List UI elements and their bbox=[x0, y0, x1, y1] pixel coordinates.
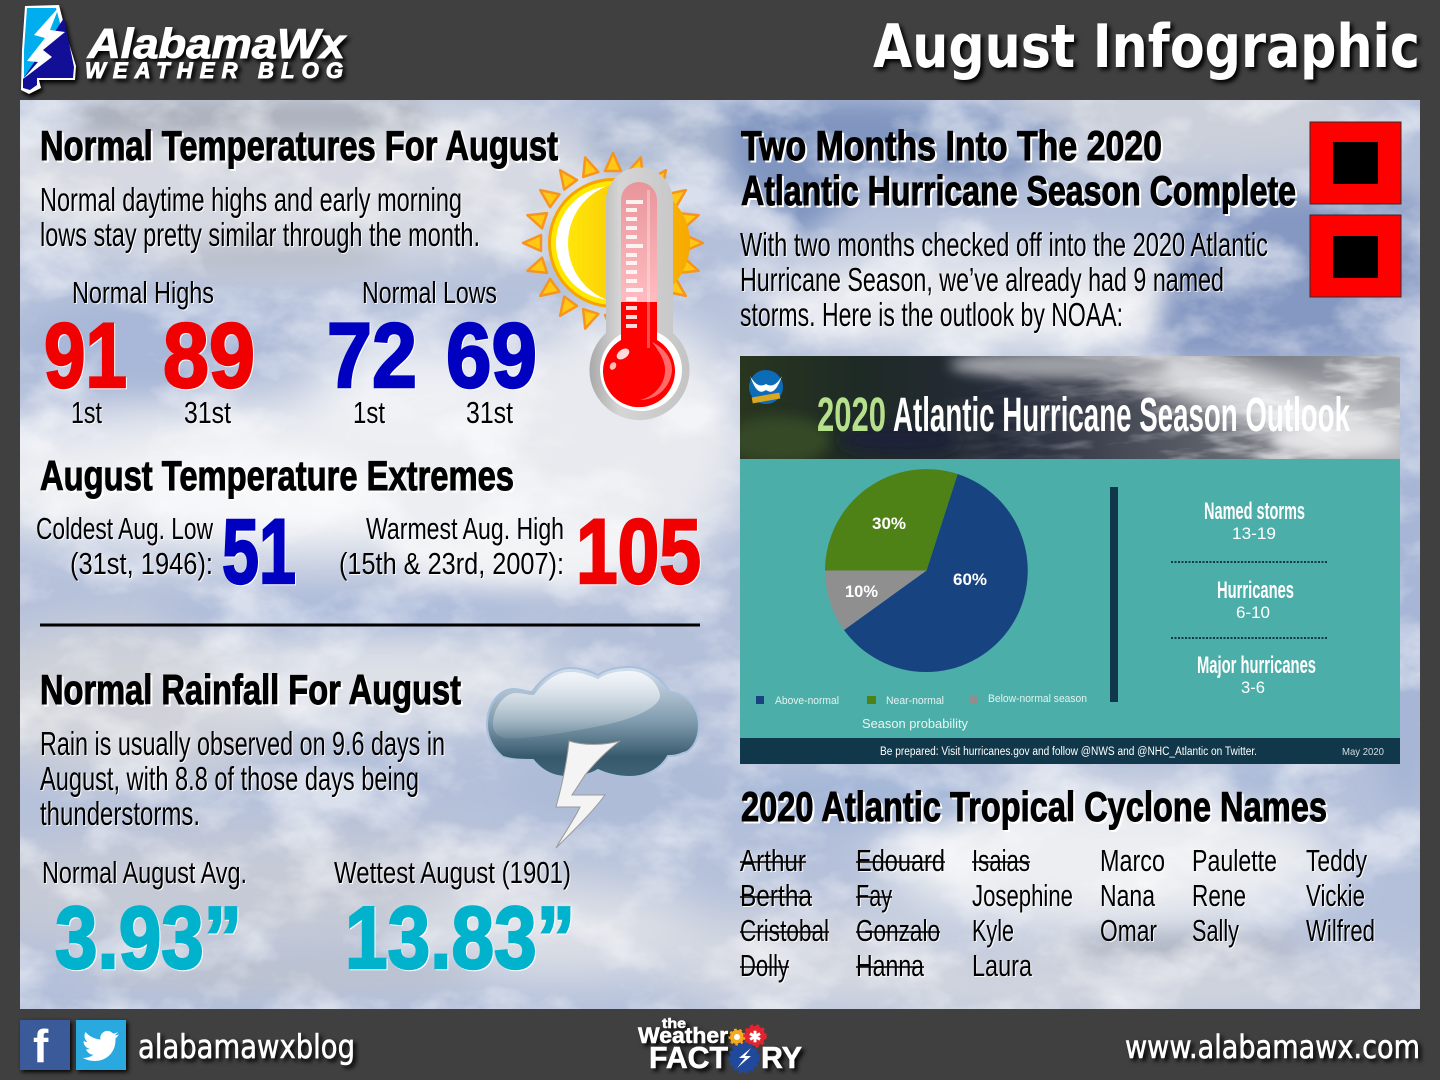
names column 4: Omar bbox=[1100, 913, 1157, 948]
text block: coldest low bbox=[36, 511, 213, 581]
stat: normal August rainfall bbox=[42, 855, 247, 987]
outlook footer bar: May 2020 bbox=[1342, 746, 1384, 758]
icon: Facebook: f bbox=[33, 1020, 49, 1072]
pie legend bbox=[756, 693, 1087, 707]
text block: warmest high: Warmest Aug. High bbox=[366, 511, 564, 546]
names column 6 bbox=[1306, 843, 1375, 948]
names column 2 (used names struck through): Fay bbox=[856, 878, 892, 913]
stat: low on the 1st: 1st bbox=[353, 395, 385, 430]
pie legend: Near-normal bbox=[886, 695, 944, 707]
heading: hurricane season bbox=[741, 122, 1296, 214]
text block: coldest low: Coldest Aug. Low bbox=[36, 511, 213, 546]
heading: hurricane season: Two Months Into The 2020 bbox=[741, 122, 1162, 169]
pie chart: season probability: 30% bbox=[872, 514, 906, 533]
stat: normal August rainfall: Normal August Avg. bbox=[42, 855, 247, 890]
icon: NOAA logo bbox=[749, 370, 783, 404]
hurricanes range: 6-10 bbox=[1236, 603, 1270, 622]
names column 2 (used names struck through): Edouard bbox=[856, 843, 945, 878]
text block: rainfall description: Rain is usually observed on 9.6 days in bbox=[40, 725, 445, 762]
panel: normal temperatures bbox=[40, 122, 558, 430]
names column 3 bbox=[972, 843, 1073, 983]
outlook body background bbox=[740, 459, 1400, 738]
stat: low on the 31st: 69 bbox=[446, 305, 537, 407]
icon: hurricane warning flag bottom bbox=[1310, 215, 1401, 297]
names column 5: Sally bbox=[1192, 913, 1239, 948]
logo tagline: WEATHER BLOG bbox=[85, 58, 343, 83]
names column 5 bbox=[1192, 843, 1277, 948]
names column 1 (used names struck through) bbox=[740, 843, 829, 983]
logo: the Weather Factory: the bbox=[662, 1015, 686, 1031]
social handle: alabamawxblog bbox=[138, 1027, 355, 1066]
names column 3: Isaias bbox=[972, 843, 1030, 878]
panel: tropical cyclone names bbox=[740, 783, 1375, 983]
names column 1 (used names struck through): Bertha bbox=[740, 878, 813, 913]
hurricanes range: Hurricanes bbox=[1217, 577, 1294, 604]
stat: warmest high value: 105 bbox=[576, 501, 701, 603]
names column 4 bbox=[1100, 843, 1165, 948]
label: normal highs: Normal Highs bbox=[72, 275, 214, 310]
names column 2 (used names struck through): Hanna bbox=[856, 948, 925, 983]
stat: low on the 31st: 31st bbox=[466, 395, 513, 430]
stat: low on the 1st: 72 bbox=[327, 305, 417, 407]
logo wordmark: AlabamaWx bbox=[87, 20, 347, 67]
icon: Alabama state lightning logo bbox=[21, 5, 76, 94]
text block: season description bbox=[740, 226, 1268, 333]
icon: Facebook bbox=[20, 1020, 70, 1072]
names column 4: Nana bbox=[1100, 878, 1156, 913]
outlook footer bar: Be prepared: Visit hurricanes.gov and follow @NWS and @NHC_Atlantic on Twitter. bbox=[880, 746, 1257, 758]
names column 1 (used names struck through): Cristobal bbox=[740, 913, 829, 948]
names column 1 (used names struck through): Dolly bbox=[740, 948, 789, 983]
text block: rainfall description: thunderstorms. bbox=[40, 795, 200, 832]
names column 6: Wilfred bbox=[1306, 913, 1375, 948]
major hurricanes range bbox=[1197, 652, 1316, 697]
pie legend: Above-normal bbox=[775, 695, 839, 707]
logo: the Weather Factory: Weather bbox=[638, 1023, 728, 1048]
icon: sun behind thermometer bbox=[523, 153, 703, 333]
text block: season description: storms. Here is the outlook by NOAA: bbox=[740, 296, 1123, 333]
icon: orange gear bbox=[730, 1030, 744, 1044]
names column 5: Paulette bbox=[1192, 843, 1277, 878]
panel: header logo bbox=[21, 5, 347, 94]
pie chart: season probability: 60% bbox=[953, 570, 987, 589]
named storms range bbox=[1204, 498, 1305, 543]
names column 3: Josephine bbox=[972, 878, 1073, 913]
named storms range: 13-19 bbox=[1232, 524, 1276, 543]
stat: high on the 1st: 91 bbox=[44, 305, 127, 407]
major hurricanes range: Major hurricanes bbox=[1197, 652, 1316, 679]
stat: high on the 31st: 31st bbox=[184, 395, 231, 430]
pie chart: season probability bbox=[825, 469, 1028, 672]
stat: high on the 31st: 89 bbox=[163, 305, 255, 407]
stat: high on the 1st bbox=[44, 305, 127, 430]
names column 1 (used names struck through): Arthur bbox=[740, 843, 806, 878]
text block: coldest low: (31st, 1946): bbox=[70, 546, 213, 581]
text block: rainfall description bbox=[40, 725, 445, 832]
text block: warmest high bbox=[339, 511, 564, 581]
outlook title: 2020 bbox=[817, 389, 886, 442]
outlook header: satellite image and title bbox=[740, 356, 1400, 459]
text block: rainfall description: August, with 8.8 of those days being bbox=[40, 760, 419, 797]
names column 6: Vickie bbox=[1306, 878, 1365, 913]
panel: temperature extremes bbox=[36, 452, 701, 603]
names column 4: Marco bbox=[1100, 843, 1165, 878]
icon: storm cloud with lightning bbox=[487, 667, 699, 848]
forecast ranges bbox=[1171, 498, 1328, 697]
panel: NOAA 2020 outlook graphic bbox=[740, 356, 1400, 764]
panel: normal rainfall bbox=[40, 666, 575, 987]
icon: hurricane warning flag top bbox=[1310, 122, 1401, 204]
heading: temperature extremes: August Temperature Extremes bbox=[40, 452, 514, 499]
panel: hurricane season text bbox=[740, 122, 1296, 333]
icon: red gear: ✱ bbox=[749, 1029, 762, 1046]
major hurricanes range: 3-6 bbox=[1241, 678, 1265, 697]
text block: temperature description: Normal daytime highs and early morning bbox=[40, 181, 462, 218]
text block: temperature description: lows stay pretty similar through the month. bbox=[40, 216, 480, 253]
names column 3: Laura bbox=[972, 948, 1033, 983]
pie chart: season probability: 10% bbox=[845, 582, 878, 601]
stat: coldest low value: 51 bbox=[222, 501, 296, 603]
stat: wettest August rainfall: 13.83” bbox=[345, 888, 575, 987]
logo: the Weather Factory: FACT bbox=[649, 1040, 728, 1075]
text block: warmest high: (15th & 23rd, 2007): bbox=[339, 546, 564, 581]
icon: Twitter bbox=[76, 1020, 126, 1070]
text block: temperature description bbox=[40, 181, 480, 253]
hurricanes range bbox=[1217, 577, 1294, 622]
names column 6: Teddy bbox=[1306, 843, 1367, 878]
text block: season description: Hurricane Season, we’ve already had 9 named bbox=[740, 261, 1224, 298]
names column 2 (used names struck through) bbox=[856, 843, 945, 983]
icon: blue gear bbox=[730, 1044, 758, 1072]
logo: the Weather Factory bbox=[638, 1015, 802, 1075]
named storms range: Named storms bbox=[1204, 498, 1305, 525]
pie caption: Season probability bbox=[862, 716, 968, 731]
names column 5: Rene bbox=[1192, 878, 1246, 913]
icon: thermometer bbox=[590, 168, 690, 420]
outlook footer bar bbox=[740, 738, 1400, 764]
stat: high on the 1st: 1st bbox=[71, 395, 102, 430]
panel: footer bbox=[20, 1015, 1420, 1075]
names column 2 (used names struck through): Gonzalo bbox=[856, 913, 940, 948]
stat: wettest August rainfall: Wettest August (1901) bbox=[334, 855, 571, 890]
stat: wettest August rainfall bbox=[334, 855, 575, 987]
stat: normal August rainfall: 3.93” bbox=[55, 888, 242, 987]
heading: normal temperatures: Normal Temperatures For August bbox=[40, 122, 558, 169]
label: normal lows: Normal Lows bbox=[362, 275, 497, 310]
vertical divider bar bbox=[1110, 487, 1118, 702]
names column 3: Kyle bbox=[972, 913, 1014, 948]
pie legend: Below-normal season bbox=[988, 693, 1087, 705]
heading: normal rainfall: Normal Rainfall For August bbox=[40, 666, 461, 713]
icon: red gear bbox=[745, 1026, 765, 1046]
logo: the Weather Factory: RY bbox=[761, 1040, 802, 1075]
